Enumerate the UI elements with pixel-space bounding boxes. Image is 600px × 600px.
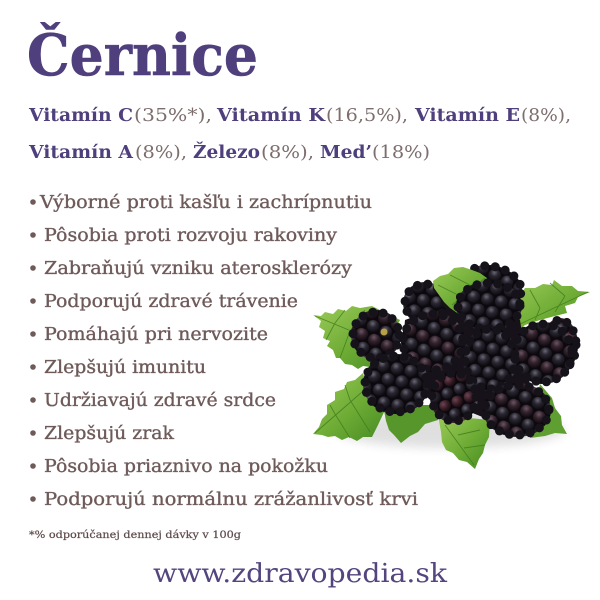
vitamins and minerals list: (8%), xyxy=(261,143,314,163)
title: Černice xyxy=(27,21,258,89)
vitamins and minerals list: (35%*), xyxy=(134,106,212,126)
berry: center left xyxy=(401,312,465,372)
vitamins and minerals list: (18%) xyxy=(372,143,430,163)
benefits list: Podporujú zdravé trávenie xyxy=(44,292,298,312)
leaf: lower right xyxy=(530,384,567,438)
berry: right back xyxy=(542,318,578,372)
berry: top center xyxy=(456,281,522,331)
benefits list xyxy=(30,193,418,510)
illustration: blackberries with leaves xyxy=(313,258,590,469)
benefits list: Udržiavajú zdravé srdce xyxy=(44,391,276,411)
vitamins and minerals list: Vitamín A xyxy=(28,143,133,163)
berry: lower right xyxy=(483,383,551,437)
benefits list: Zlepšujú zrak xyxy=(44,424,174,444)
benefits list: Pôsobia priaznivo na pokožku xyxy=(44,457,328,477)
benefits list: Výborné proti kašľu i zachrípnutiu xyxy=(39,193,372,213)
benefits list: Pôsobia proti rozvoju rakoviny xyxy=(44,226,337,246)
benefits list: Podporujú normálnu zrážanlivosť krvi xyxy=(44,490,418,510)
vitamins and minerals list: Vitamín K xyxy=(216,106,326,126)
berry: lower middle xyxy=(430,371,478,423)
vitamins and minerals list xyxy=(28,106,571,163)
leaf: upper left xyxy=(313,306,400,369)
leaf: lower left xyxy=(313,373,385,441)
vitamins and minerals list: Med’ xyxy=(320,143,372,163)
benefits list: Pomáhajú pri nervozite xyxy=(44,325,268,345)
vitamins and minerals list: (16,5%), xyxy=(326,106,408,126)
leaf: bottom center xyxy=(438,415,490,469)
website url: www.zdravopedia.sk xyxy=(153,559,447,589)
berry: back top xyxy=(461,258,527,312)
leaf: bottom small xyxy=(383,405,438,443)
vitamins and minerals list: Železo xyxy=(193,142,260,163)
benefits list: Zlepšujú imunitu xyxy=(44,358,206,378)
vitamins and minerals list: Vitamín E xyxy=(414,106,520,126)
footnote: *% odporúčanej dennej dávky v 100g xyxy=(29,530,242,541)
berry: center xyxy=(463,327,517,391)
leaf: top right xyxy=(510,280,590,335)
vitamins and minerals list: (8%), xyxy=(521,106,571,126)
vitamins and minerals list: (8%), xyxy=(135,143,187,163)
benefits list: Zabraňujú vzniku aterosklerózy xyxy=(44,259,352,279)
berry: small left xyxy=(351,310,401,360)
berry: right xyxy=(512,322,574,384)
berry cluster dark base xyxy=(400,300,530,420)
berry: lower left xyxy=(363,354,429,414)
vitamins and minerals list: Vitamín C xyxy=(28,106,133,126)
leaf: top center xyxy=(433,267,487,315)
berry: upper left back xyxy=(403,282,447,324)
